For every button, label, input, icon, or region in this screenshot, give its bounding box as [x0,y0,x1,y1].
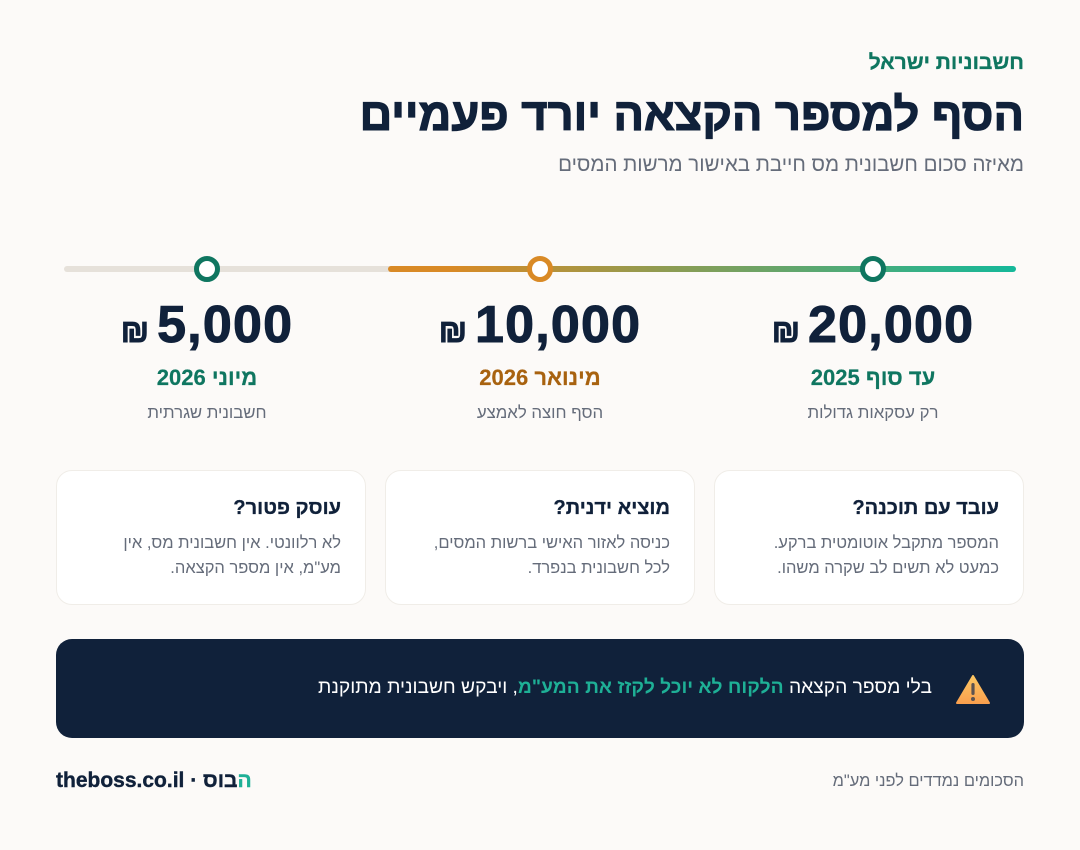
card text: לא רלוונטי. אין חשבונית מס, אין [123,534,341,552]
timeline [64,256,1016,282]
footnote: הסכומים נמדדים לפני מע"מ [833,772,1024,790]
eyebrow label: חשבוניות ישראל [869,51,1024,74]
card text [123,534,341,577]
marker: end of 2025 [860,256,886,282]
threshold: 20,000 [772,296,974,422]
card: exempt dealer [56,470,366,605]
card text: לכל חשבונית בנפרד. [528,559,670,577]
card heading: עובד עם תוכנה? [852,497,999,519]
timeline track: coloured segment [388,266,1016,272]
date: עד סוף 2025 [811,365,935,390]
card text [434,534,670,577]
amount: ₪5,000 [121,296,293,354]
date: מינואר 2026 [479,365,601,390]
card text: כמעט לא תשים לב שקרה משהו. [777,559,999,577]
threshold: 10,000 [439,296,641,422]
amount: ₪10,000 [439,296,641,354]
marker: January 2026 [527,256,553,282]
threshold: 5,000 [121,296,293,422]
description: רק עסקאות גדולות [808,403,938,422]
card heading: עוסק פטור? [233,497,341,519]
amount: ₪20,000 [772,296,974,354]
card heading: מוציא ידנית? [554,497,670,519]
card: manual invoices [385,470,695,605]
card text: כניסה לאזור האישי ברשות המסים, [434,534,670,552]
card: software users [714,470,1024,605]
banner text: בלי מספר הקצאה הלקוח לא יוכל לקזז את המע"מ, ויבקש חשבונית מתוקנת [318,677,932,698]
icon: warning triangle [956,675,990,704]
card text: מע"מ, אין מספר הקצאה. [170,559,341,577]
card text: המספר מתקבל אוטומטית ברקע. [774,534,999,552]
brand: theboss.co.il · הבוס [56,769,252,792]
title: הסף למספר הקצאה יורד פעמיים [360,89,1024,140]
card text [774,534,999,577]
date: מיוני 2026 [157,365,257,390]
timeline track: future segment [64,266,394,272]
warning banner [56,639,1024,738]
description: הסף חוצה לאמצע [477,403,603,422]
description: חשבונית שגרתית [147,403,267,422]
subtitle: מאיזה סכום חשבונית מס חייבת באישור מרשות המסים [558,153,1024,176]
marker: June 2026 [194,256,220,282]
